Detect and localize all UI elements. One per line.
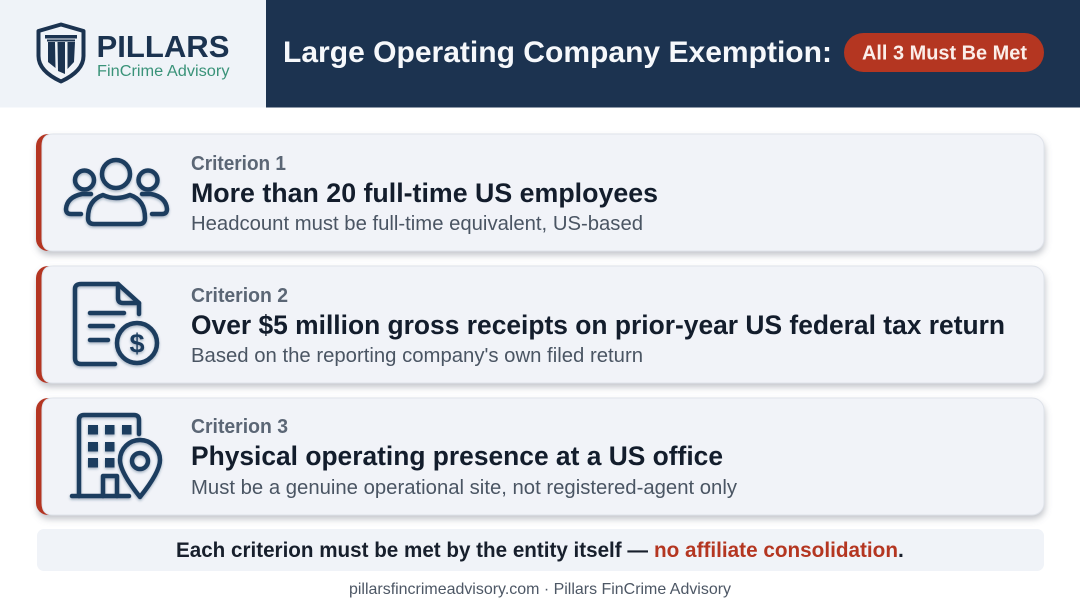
logo: Pillars FinCrime Advisory	[38, 24, 230, 82]
criterion heading: Physical operating presence at a US office	[191, 441, 723, 471]
badge: all 3 must be met	[844, 33, 1044, 72]
icon: tax document with dollar	[75, 284, 157, 364]
callout: no affiliate consolidation: Each criterion must be met by the entity itself —	[176, 539, 648, 562]
badge: all 3 must be met: All 3 Must Be Met	[862, 42, 1027, 64]
callout: no affiliate consolidation: .	[898, 539, 904, 562]
criterion label: Criterion 1	[191, 153, 286, 175]
logo tagline: FinCrime Advisory	[97, 63, 230, 80]
callout: no affiliate consolidation: no affiliate consolidation	[654, 539, 898, 562]
callout: no affiliate consolidation	[37, 529, 1044, 571]
logo wordmark: PILLARS	[96, 29, 230, 64]
panel: criterion 3	[36, 398, 1044, 515]
criterion heading: Over $5 million gross receipts on prior-year US federal tax return	[191, 310, 1005, 340]
criterion detail: Must be a genuine operational site, not registered-agent only	[191, 477, 737, 499]
criterion label: Criterion 2	[191, 285, 288, 307]
icon: shield with pillar	[38, 24, 84, 82]
criterion detail: Based on the reporting company's own filed return	[191, 345, 643, 367]
header band	[0, 0, 1080, 108]
icon: office building with location pin	[72, 415, 160, 497]
icon: people group	[66, 160, 167, 224]
criterion heading: More than 20 full-time US employees	[191, 178, 658, 208]
criterion label: Criterion 3	[191, 416, 288, 438]
title: Large Operating Company Exemption:	[283, 36, 832, 69]
panel: criterion 2	[36, 266, 1044, 383]
panel: criterion 1	[36, 134, 1044, 251]
criterion detail: Headcount must be full-time equivalent, US-based	[191, 213, 643, 235]
panel: logo background	[0, 0, 266, 108]
icon: tax document with dollar: $	[129, 328, 145, 358]
footer: pillarsfincrimeadvisory.com · Pillars FinCrime Advisory	[349, 581, 731, 598]
